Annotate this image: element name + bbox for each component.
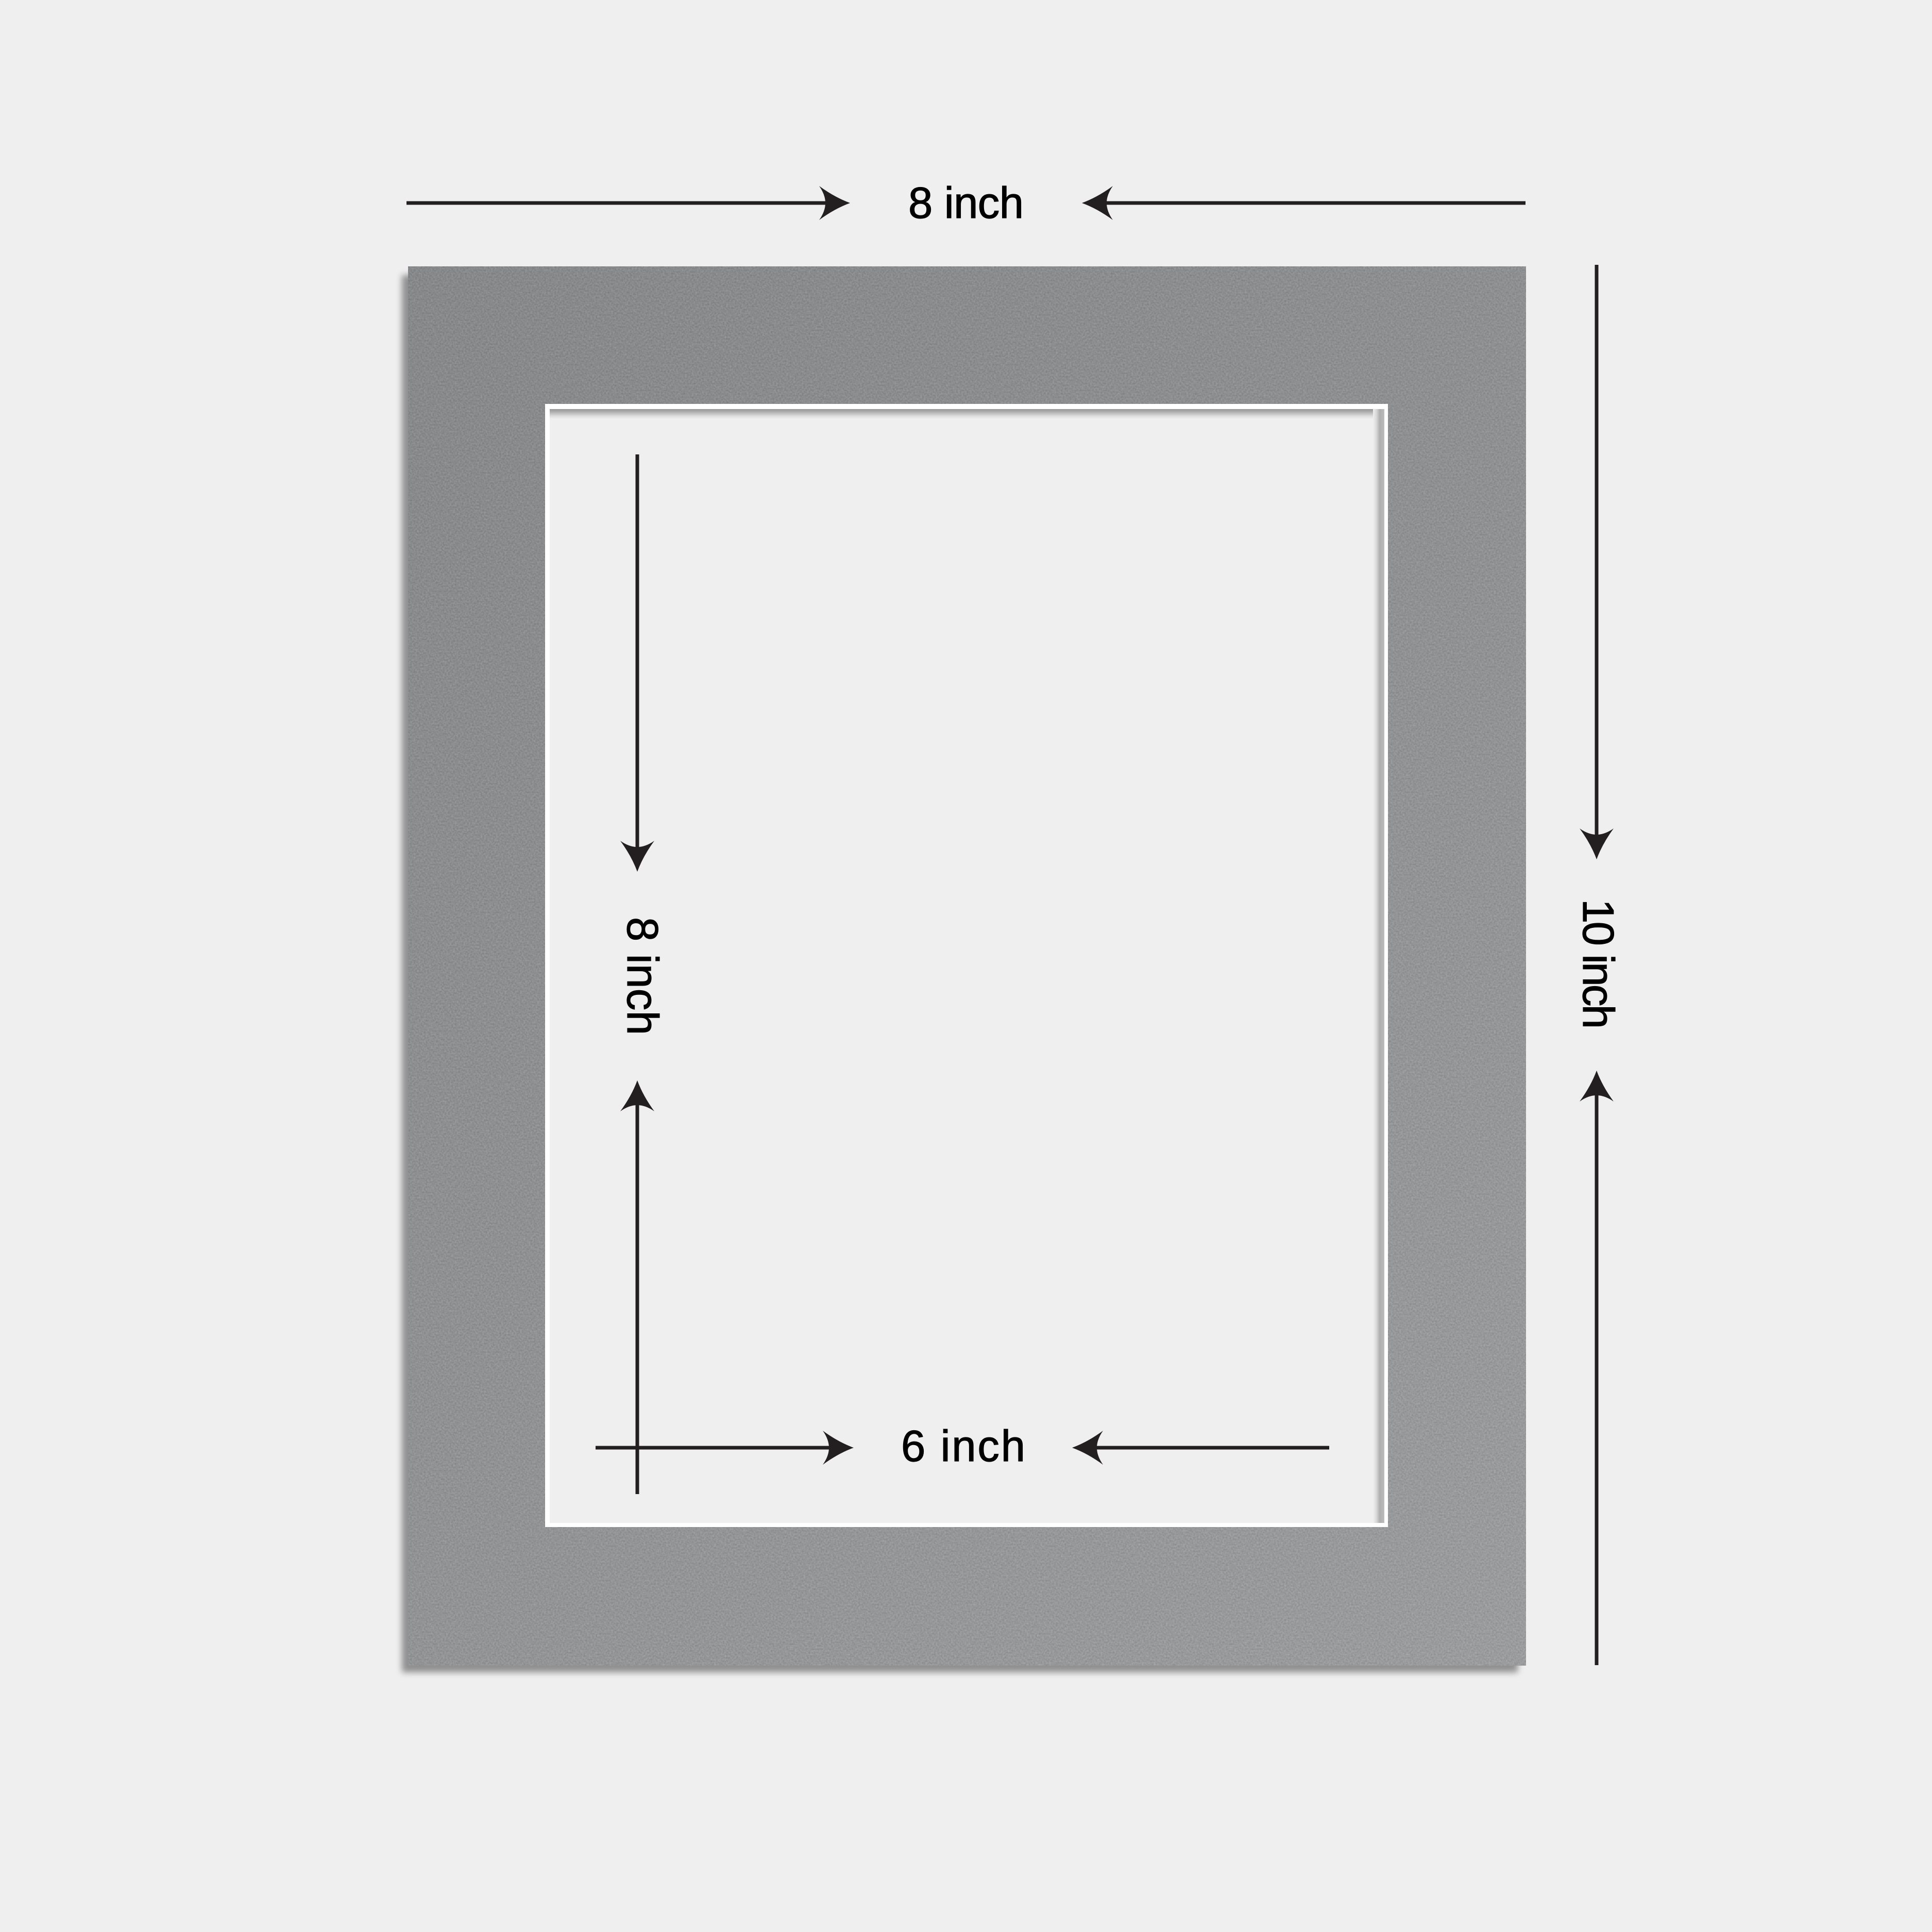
arrow: upper pointing down <box>1580 265 1614 859</box>
arrow: left pointing right <box>406 186 850 220</box>
inner left dimension: 8 inch <box>618 454 667 1494</box>
top dimension: 8 inch <box>406 179 1526 228</box>
arrow: lower pointing up <box>620 1080 654 1494</box>
arrow: left pointing right <box>596 1431 854 1465</box>
mat drop shadow <box>402 275 1518 1672</box>
white bevel around window <box>545 404 1388 1527</box>
arrow: right pointing left <box>1072 1431 1329 1465</box>
right dimension: 10 inch <box>1573 265 1622 1665</box>
window inner shadow top <box>550 409 1384 419</box>
arrow: lower pointing up <box>1580 1071 1614 1665</box>
label: 8 inch: 8 inch <box>618 917 667 1035</box>
window opening <box>545 404 1388 1527</box>
mat board <box>408 266 1526 1666</box>
panel: grey photo mat with window <box>402 266 1526 1672</box>
window inner shadow right <box>1373 409 1384 1523</box>
arrow: right pointing left <box>1082 186 1526 220</box>
label: 10 inch: 10 inch <box>1573 899 1622 1029</box>
inner bottom dimension: 6 inch <box>596 1422 1329 1471</box>
label: 6 inch: 6 inch <box>901 1422 1025 1471</box>
arrow: upper pointing down <box>620 454 654 872</box>
label: 8 inch: 8 inch <box>908 179 1024 228</box>
